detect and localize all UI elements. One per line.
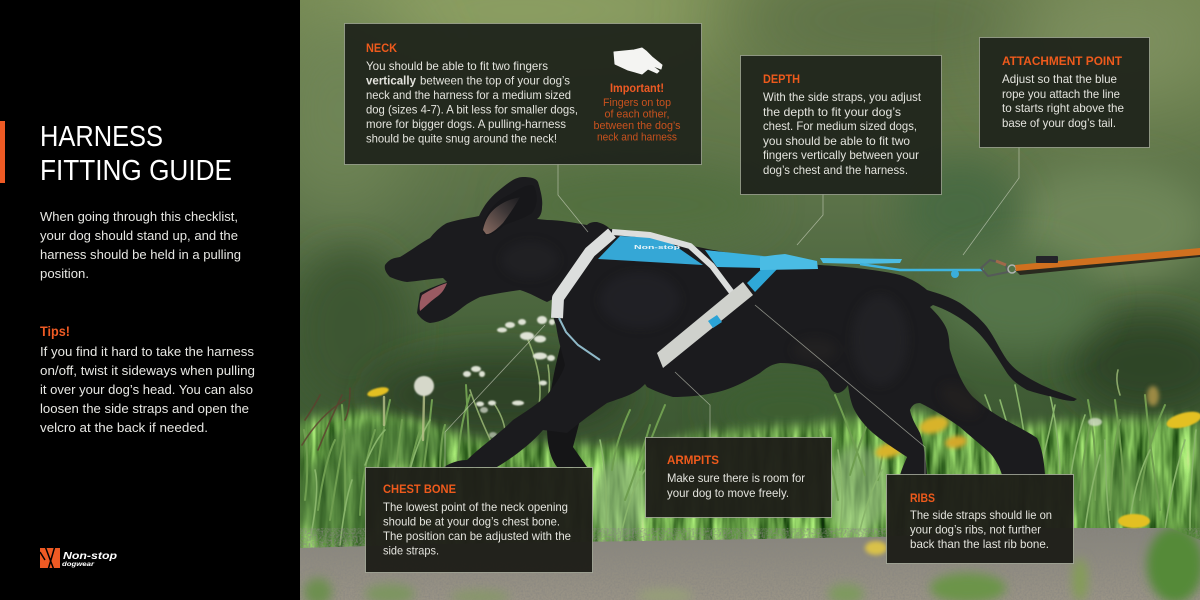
grass base [295, 410, 1200, 565]
chest bone text: should be at your dog’s chest bone. [383, 514, 560, 528]
tips text: on/off, twist it sideways when pulling [40, 363, 255, 378]
important note: Important! [610, 83, 664, 95]
logo on harness: Non-stop [634, 245, 680, 251]
attachment point text: Adjust so that the blue [1002, 72, 1117, 86]
important note: between the dog’s [594, 120, 681, 132]
important note [594, 83, 681, 144]
chest bone text [383, 500, 571, 558]
carabiner [981, 260, 1016, 276]
panel: neck [344, 24, 702, 164]
important note: Fingers on top [603, 97, 671, 109]
rope [860, 264, 984, 270]
heading: ribs: RIBS [910, 493, 935, 505]
white wildflowers [463, 316, 1102, 438]
blue clip [708, 315, 722, 328]
chest bone text: The lowest point of the neck opening [383, 500, 568, 514]
harness [557, 232, 984, 368]
grass blades [302, 340, 1196, 545]
tips text: loosen the side straps and open the [40, 401, 249, 416]
tips text: it over your dog’s head. You can also [40, 382, 253, 397]
neck text: should be quite snug around the neck! [366, 132, 557, 146]
tips text: velcro at the back if needed. [40, 420, 208, 435]
depth text [763, 90, 922, 177]
blue diagonal strap [747, 270, 777, 292]
armpits text [667, 471, 805, 500]
rear back strap [760, 254, 818, 270]
far leg [547, 346, 587, 467]
attachment point text: base of your dog’s tail. [1002, 116, 1116, 130]
neck text: between the top of your dog’s [420, 74, 570, 88]
white neck strap [557, 233, 612, 318]
attachment point text: rope you attach the line [1002, 87, 1120, 101]
neck text [366, 59, 578, 146]
intro text: your dog should stand up, and the [40, 228, 238, 243]
panel: attachment point [980, 38, 1150, 148]
depth text: fingers vertically between your [763, 148, 919, 162]
neck text: vertically [366, 74, 416, 88]
heading: neck: NECK [366, 43, 398, 55]
dog [385, 177, 1200, 475]
intro text: When going through this checklist, [40, 209, 238, 224]
armpits text: Make sure there is room for [667, 471, 805, 485]
depth text: the depth to fit your dog’s [763, 105, 901, 119]
blurred forest backdrop [270, 0, 1200, 440]
chest bone text: The position can be adjusted with the [383, 529, 571, 543]
panel: ribs [886, 474, 1074, 564]
ear [483, 185, 537, 235]
neck text: more for bigger dogs. A pulling-harness [366, 117, 566, 131]
gravel path [300, 528, 1200, 600]
loose strap [820, 258, 902, 264]
intro text [40, 209, 241, 281]
dandelion [414, 376, 434, 396]
body shading [968, 390, 977, 400]
panel: depth [740, 56, 942, 194]
depth text: chest. For medium sized dogs, [763, 119, 917, 133]
attachment point text [1002, 72, 1124, 130]
panel: chest bone [366, 468, 592, 572]
side strap [657, 282, 753, 368]
brand logo: Non-stop [63, 550, 118, 562]
ribs text: The side straps should lie on [910, 508, 1052, 522]
dog body [385, 177, 1077, 475]
connector lines [445, 147, 1019, 474]
armpits text: your dog to move freely. [667, 486, 789, 500]
heading: depth: DEPTH [763, 74, 800, 86]
accent bar [0, 121, 5, 183]
yellow flowers [366, 385, 1200, 555]
chest bone text: side straps. [383, 544, 439, 558]
ribs text: your dog’s ribs, not further [910, 522, 1041, 536]
heading: chest bone: CHEST BONE [383, 484, 456, 496]
photo background: running dog in a meadow [270, 0, 1200, 600]
heading: armpits: ARMPITS [667, 455, 719, 467]
title [40, 121, 232, 187]
depth text: dog’s chest and the harness. [763, 163, 908, 177]
open mouth [420, 283, 447, 311]
neck text: neck and the harness for a medium sized [366, 88, 571, 102]
depth text: you should be able to fit two [763, 134, 910, 148]
panel: armpits [646, 438, 832, 518]
important note: neck and harness [597, 132, 677, 144]
depth text: With the side straps, you adjust [763, 90, 922, 104]
left sidebar [0, 0, 300, 600]
neck text: dog (sizes 4-7). A bit less for smaller dogs, [366, 102, 578, 116]
orange leash [1015, 248, 1200, 275]
foreground blurred plants [304, 527, 1200, 600]
tips text [40, 344, 255, 435]
ribs text: back than the last rib bone. [910, 537, 1049, 551]
title: FITTING GUIDE [40, 155, 232, 187]
intro text: harness should be held in a pulling [40, 247, 241, 262]
icon: hand with two stacked fingers [614, 48, 662, 74]
brand logo: dogwear [62, 561, 95, 568]
attachment point text: to starts right above the [1002, 101, 1124, 115]
tips heading: Tips! [40, 324, 70, 339]
intro text: position. [40, 266, 89, 281]
title: HARNESS [40, 121, 163, 153]
heading: attachment point: ATTACHMENT POINT [1002, 56, 1122, 68]
neck text: You should be able to fit two fingers [366, 59, 548, 73]
tips text: If you find it hard to take the harness [40, 344, 255, 359]
brand logo [40, 546, 118, 570]
blue back panel [598, 236, 703, 265]
important note: of each other, [604, 108, 670, 120]
ribs text [910, 508, 1052, 551]
